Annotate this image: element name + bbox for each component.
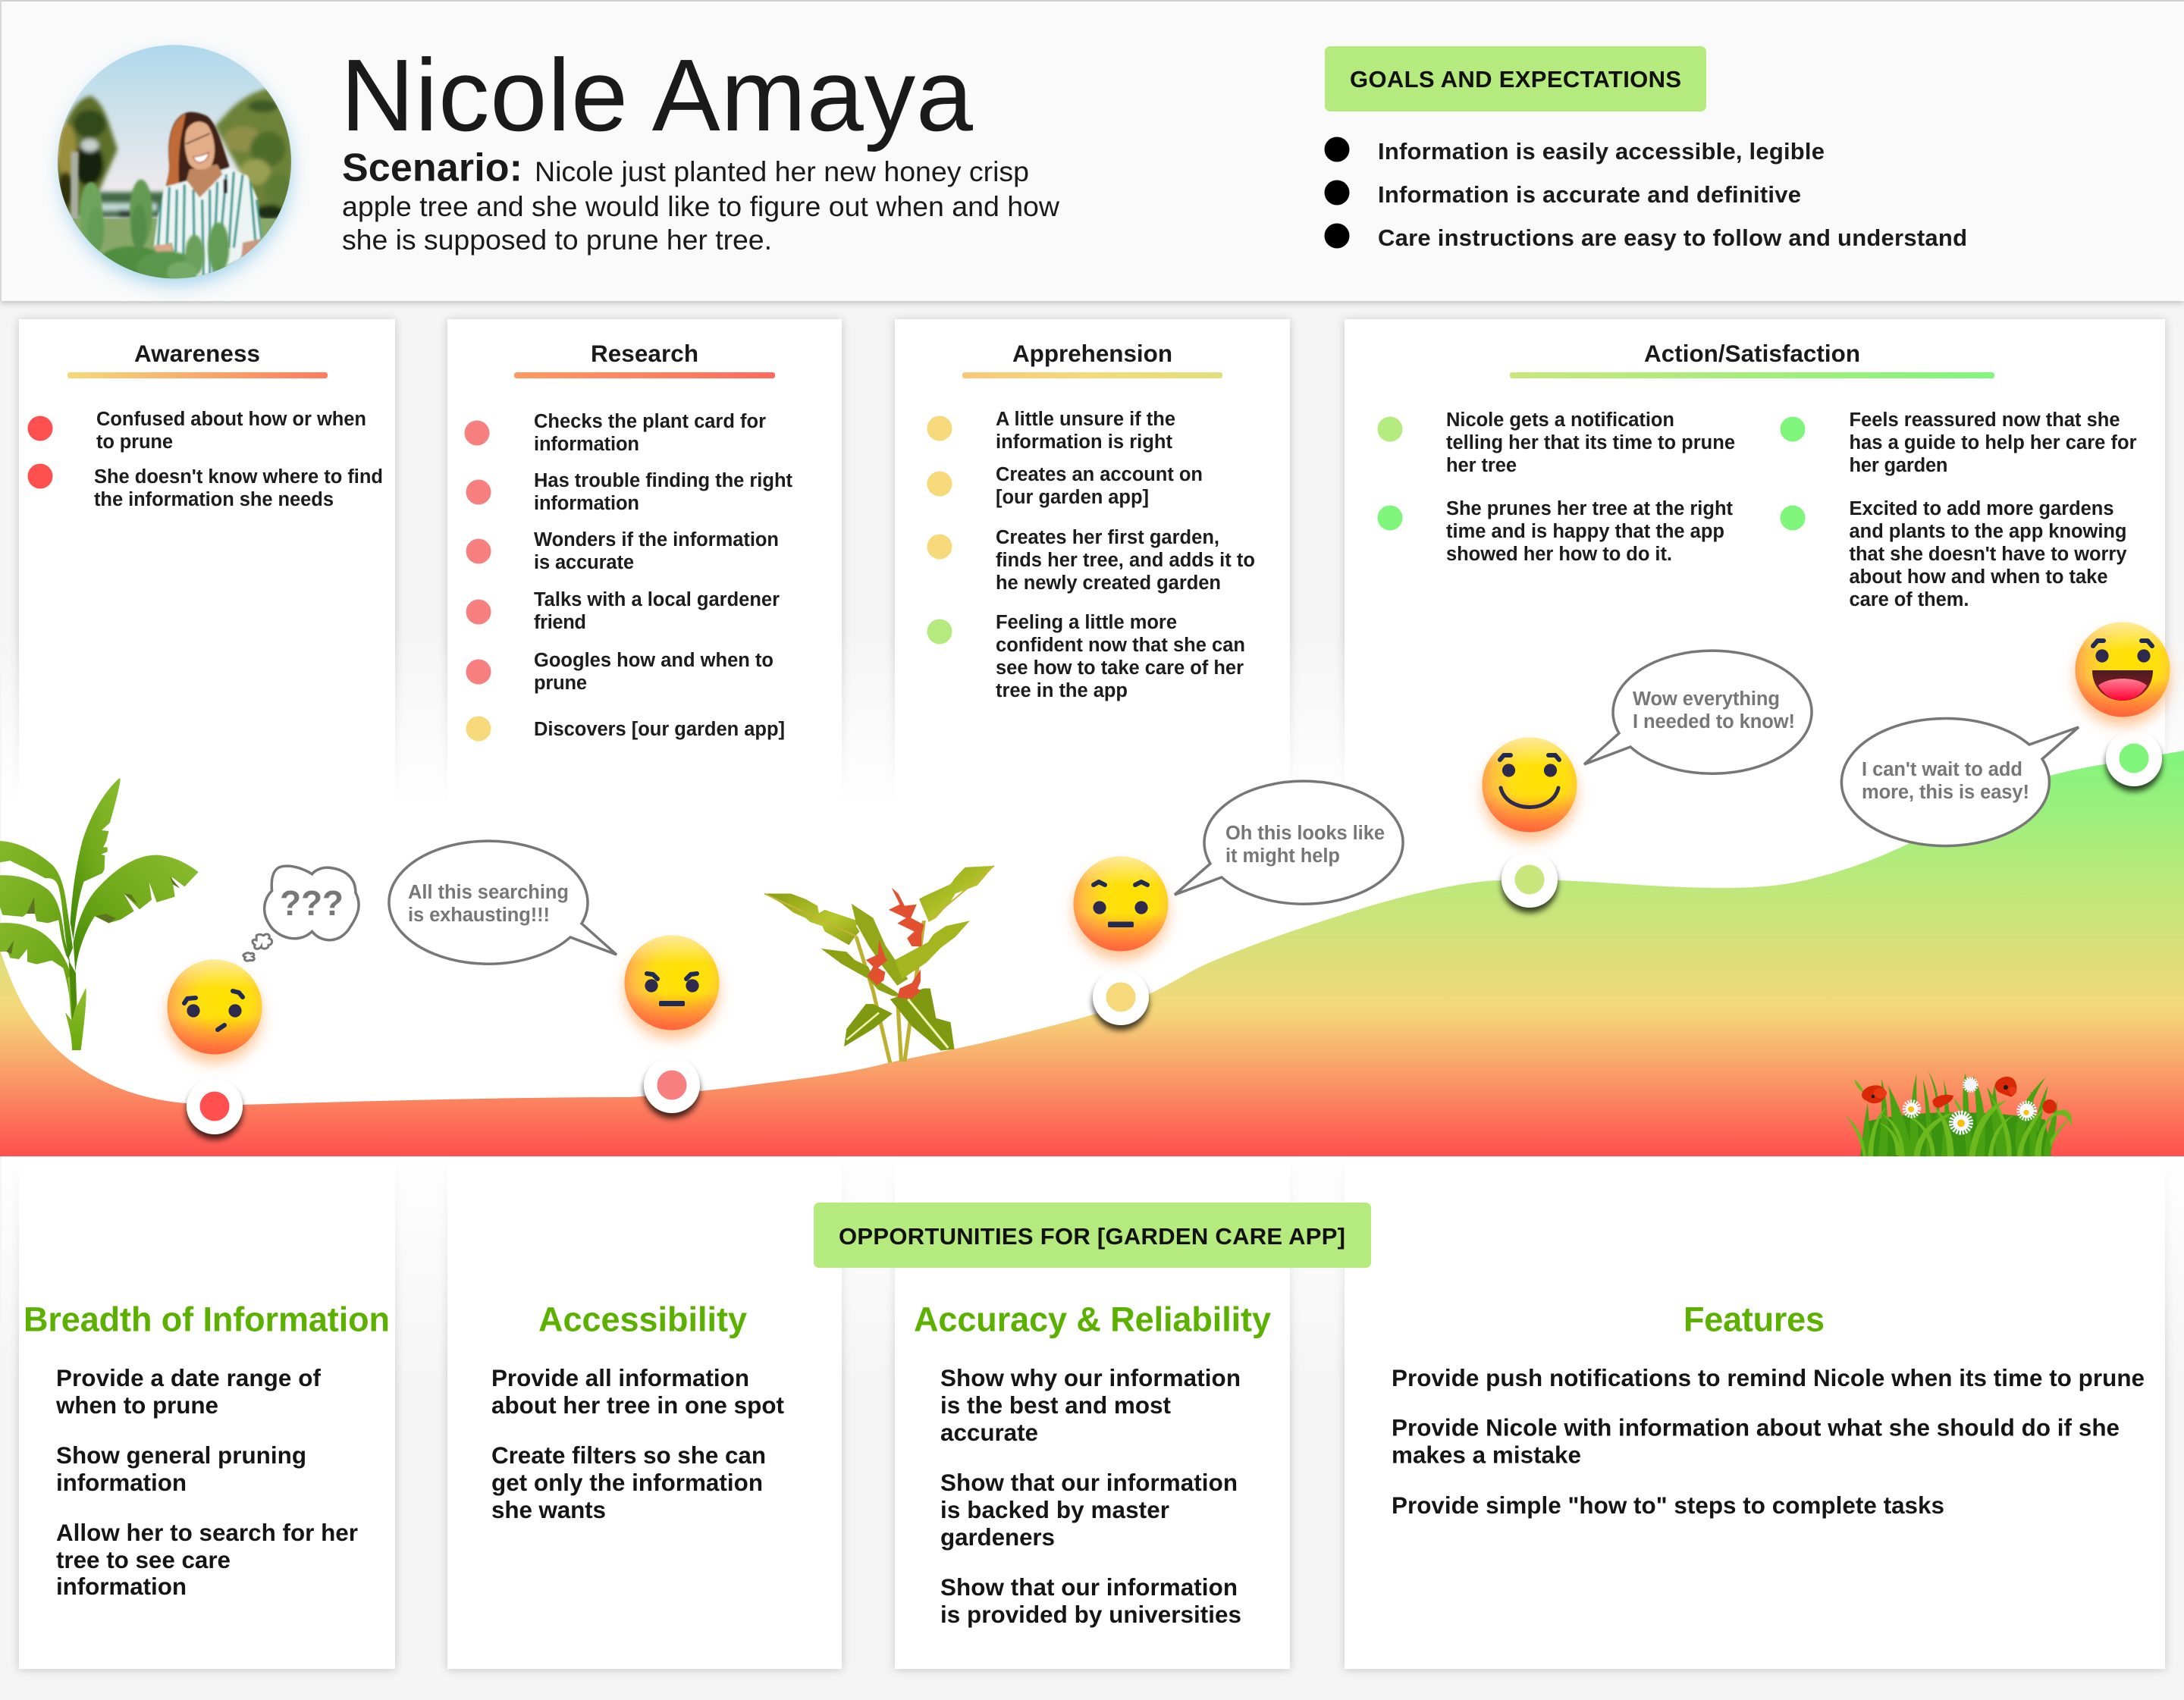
list item: time and is happy that the app bbox=[1446, 521, 1724, 542]
list item: Excited to add more gardens bbox=[1849, 498, 2114, 519]
list item: that she doesn't have to worry bbox=[1849, 544, 2127, 565]
scenario text bbox=[342, 146, 1060, 256]
poppy bbox=[2042, 1099, 2057, 1114]
list item: about how and when to take bbox=[1849, 566, 2108, 588]
thought bubble bbox=[243, 866, 359, 961]
opportunity list: about her tree in one spot bbox=[491, 1392, 785, 1419]
opportunity list bbox=[1392, 1365, 2145, 1519]
goals heading badge bbox=[1325, 46, 1706, 111]
illustration: banana plant bbox=[0, 778, 199, 1050]
list item: information bbox=[534, 493, 639, 514]
panel: accuracy and reliability bbox=[914, 1300, 1271, 1628]
white fade band behind journey curve bbox=[2, 629, 2184, 1384]
opportunity heading: Features bbox=[1684, 1300, 1825, 1339]
illustration: grass and flowers bbox=[1844, 1071, 2073, 1156]
stage underline bbox=[67, 372, 328, 378]
poppy bbox=[1995, 1077, 2016, 1097]
daisy bbox=[1953, 1115, 1969, 1131]
speech bubble: everything I needed: Wow everything bbox=[1633, 688, 1780, 710]
photo of Nicole bbox=[55, 43, 293, 285]
list item: care of them. bbox=[1849, 589, 1969, 610]
list item bbox=[464, 411, 766, 455]
panel: research bbox=[464, 340, 793, 742]
face bbox=[185, 122, 215, 170]
opportunity list: Provide push notifications to remind Nicole when its time to prune bbox=[1392, 1365, 2145, 1391]
illustration: heliconia plant bbox=[764, 866, 994, 1063]
list item: Feeling a little more bbox=[996, 612, 1177, 633]
thought bubble: ??? bbox=[280, 883, 344, 923]
stage heading: Action/Satisfaction bbox=[1644, 340, 1860, 367]
opportunity list bbox=[491, 1365, 785, 1523]
scenario text: apple tree and she would like to figure out when and how bbox=[342, 190, 1060, 222]
list item bbox=[1377, 409, 1735, 476]
opportunity list: Allow her to search for her bbox=[56, 1520, 358, 1546]
opportunity heading: Accuracy & Reliability bbox=[914, 1300, 1271, 1339]
emotion point 5 bbox=[2106, 730, 2162, 786]
opportunity list bbox=[940, 1365, 1241, 1628]
list item: Googles how and when to bbox=[534, 650, 774, 671]
goals list: Information is easily accessible, legible bbox=[1378, 138, 1825, 165]
opportunity list: tree to see care bbox=[56, 1547, 231, 1573]
emoji: annoyed bbox=[625, 936, 719, 1039]
list item bbox=[1377, 498, 1734, 565]
speech bubble: everything I needed: I needed to know! bbox=[1633, 711, 1795, 732]
panel: breadth of information bbox=[24, 1300, 390, 1600]
opportunity list: when to prune bbox=[55, 1392, 218, 1419]
journey curve chart bbox=[0, 751, 2184, 1156]
panel: features bbox=[1392, 1300, 2145, 1519]
emoji: laughing bbox=[2075, 622, 2170, 726]
emotion point 1 bbox=[187, 1078, 243, 1134]
goals list bbox=[1324, 136, 1967, 251]
list item: Nicole gets a notification bbox=[1446, 409, 1674, 431]
list item: tree in the app bbox=[996, 680, 1128, 701]
opportunities banner bbox=[814, 1203, 1371, 1268]
opportunity list: gardeners bbox=[940, 1524, 1055, 1551]
speech bubble: exhausting: is exhausting!!! bbox=[408, 905, 550, 926]
opportunity list: information bbox=[56, 1573, 187, 1600]
list item: showed her how to do it. bbox=[1446, 544, 1672, 565]
opportunity list: Provide a date range of bbox=[56, 1365, 322, 1391]
list item: her tree bbox=[1446, 455, 1517, 476]
emoji: puzzled bbox=[167, 960, 262, 1063]
stage heading: Awareness bbox=[134, 340, 260, 367]
list item bbox=[927, 464, 1203, 508]
list item: Talks with a local gardener bbox=[534, 589, 780, 610]
list item: finds her tree, and adds it to bbox=[996, 550, 1255, 571]
opportunity list: Show general pruning bbox=[56, 1442, 306, 1469]
list item: he newly created garden bbox=[996, 572, 1221, 594]
opportunity list: Provide all information bbox=[491, 1365, 749, 1391]
list item: has a guide to help her care for bbox=[1849, 432, 2137, 453]
daisy bbox=[1906, 1102, 1918, 1115]
scenario text: Nicole just planted her new honey crisp bbox=[535, 155, 1029, 187]
list item: Creates her first garden, bbox=[996, 527, 1219, 548]
list item: information is right bbox=[996, 431, 1172, 453]
opportunity list: information bbox=[56, 1469, 187, 1496]
list item: Wonders if the information bbox=[534, 529, 779, 550]
speech bubble: might help: Oh this looks like bbox=[1225, 823, 1385, 844]
list item bbox=[927, 409, 1175, 453]
header panel bbox=[0, 0, 2184, 301]
speech bubble: might help bbox=[1175, 781, 1403, 904]
panel: accessibility bbox=[491, 1300, 785, 1523]
opportunity list: Show that our information bbox=[940, 1469, 1238, 1496]
goals list: Care instructions are easy to follow and understand bbox=[1378, 224, 1967, 251]
panel: awareness bbox=[27, 340, 383, 510]
list item bbox=[466, 470, 793, 514]
daisy bbox=[2019, 1104, 2034, 1118]
list item bbox=[466, 529, 779, 573]
opportunity list: Create filters so she can bbox=[491, 1442, 766, 1469]
list item: She prunes her tree at the right bbox=[1446, 498, 1734, 519]
opportunity list: Provide Nicole with information about what she should do if she bbox=[1392, 1415, 2120, 1441]
emotion point 4 bbox=[1502, 852, 1558, 908]
stage heading: Apprehension bbox=[1012, 340, 1172, 367]
list item: Discovers [our garden app] bbox=[534, 719, 785, 740]
goals list: Information is accurate and definitive bbox=[1378, 181, 1801, 208]
daisy bbox=[1964, 1079, 1976, 1091]
opportunity list: Show that our information bbox=[940, 1574, 1238, 1601]
speech bubble: can't wait bbox=[1841, 719, 2079, 846]
stage underline bbox=[1510, 372, 1994, 378]
speech bubble: exhausting bbox=[389, 841, 617, 964]
list item: A little unsure if the bbox=[996, 409, 1175, 430]
list item bbox=[1781, 409, 2137, 476]
speech bubble: exhausting: All this searching bbox=[408, 882, 569, 903]
opportunity list: get only the information bbox=[491, 1469, 763, 1496]
shirt bbox=[154, 168, 262, 277]
list item bbox=[466, 716, 785, 742]
emoji: curious bbox=[1074, 857, 1168, 960]
list item: confident now that she can bbox=[996, 635, 1245, 656]
opportunity heading: Accessibility bbox=[538, 1300, 747, 1339]
emoji: smiling bbox=[1482, 737, 1577, 841]
list item: telling her that its time to prune bbox=[1446, 432, 1735, 453]
speech bubble: everything I needed bbox=[1584, 651, 1812, 773]
arm bbox=[154, 244, 173, 256]
list item: Confused about how or when bbox=[96, 409, 366, 430]
poppy bbox=[1932, 1095, 1953, 1108]
emotion point 2 bbox=[644, 1057, 700, 1113]
opportunity list: makes a mistake bbox=[1392, 1442, 1581, 1468]
goals heading badge: GOALS AND EXPECTATIONS bbox=[1350, 66, 1681, 93]
list item: to prune bbox=[96, 431, 173, 453]
list item: [our garden app] bbox=[996, 487, 1149, 508]
list item bbox=[1781, 498, 2127, 610]
scenario text: she is supposed to prune her tree. bbox=[342, 224, 772, 256]
list item bbox=[466, 589, 780, 633]
title: Nicole Amaya bbox=[340, 38, 974, 152]
panel: apprehension bbox=[927, 340, 1255, 701]
list item: She doesn't know where to find bbox=[94, 466, 383, 488]
list item: information bbox=[534, 434, 639, 455]
list item: Has trouble finding the right bbox=[534, 470, 793, 491]
list item: is accurate bbox=[534, 552, 634, 573]
opportunity heading: Breadth of Information bbox=[24, 1300, 390, 1339]
speech bubble: can't wait: I can't wait to add bbox=[1862, 759, 2022, 780]
list item: see how to take care of her bbox=[996, 657, 1244, 679]
stage heading: Research bbox=[591, 340, 698, 367]
opportunity list bbox=[55, 1365, 358, 1600]
list item: friend bbox=[534, 612, 586, 633]
opportunity list: Provide simple "how to" steps to complete tasks bbox=[1392, 1492, 1944, 1519]
hair back bbox=[165, 111, 231, 187]
poppy bbox=[1862, 1085, 1887, 1103]
stage underline bbox=[962, 372, 1222, 378]
panel: action and satisfaction bbox=[1377, 340, 2137, 610]
foreground foliage bbox=[88, 205, 229, 282]
list item: Creates an account on bbox=[996, 464, 1203, 485]
card backgrounds bbox=[19, 319, 2165, 1669]
list item: Feels reassured now that she bbox=[1849, 409, 2120, 431]
list item bbox=[927, 527, 1255, 594]
opportunity list: Show why our information bbox=[940, 1365, 1241, 1391]
list item bbox=[27, 409, 366, 453]
opportunity list: is provided by universities bbox=[940, 1601, 1241, 1628]
list item bbox=[927, 612, 1245, 701]
speech bubble: can't wait: more, this is easy! bbox=[1862, 782, 2029, 803]
speech bubble: might help: it might help bbox=[1225, 845, 1340, 867]
list item: Checks the plant card for bbox=[534, 411, 766, 432]
opportunity list: is the best and most bbox=[940, 1392, 1172, 1419]
list item: her garden bbox=[1849, 455, 1947, 476]
list item: and plants to the app knowing bbox=[1849, 521, 2126, 542]
stage underline bbox=[514, 372, 775, 378]
opportunity list: accurate bbox=[940, 1419, 1038, 1446]
list item: prune bbox=[534, 673, 587, 694]
opportunities banner: OPPORTUNITIES FOR [GARDEN CARE APP] bbox=[839, 1223, 1345, 1250]
emotion point 3 bbox=[1093, 969, 1149, 1025]
list item: the information she needs bbox=[94, 489, 334, 510]
list item bbox=[466, 650, 774, 694]
list item bbox=[27, 464, 383, 510]
opportunity list: she wants bbox=[491, 1497, 606, 1523]
opportunity list: is backed by master bbox=[940, 1497, 1169, 1523]
scenario text: Scenario: bbox=[342, 146, 522, 190]
